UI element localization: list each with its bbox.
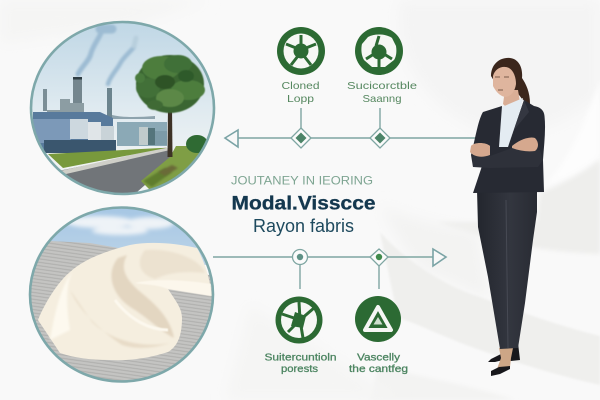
title block [231,174,376,236]
node: diamond 2 [370,128,390,148]
trousers [477,190,537,349]
road [61,150,170,193]
smoke plumes [78,29,136,84]
node: diamond 1 [291,128,311,148]
label: Cloned Lopp: Cloned [282,80,320,92]
label: Sucicorctble Saanng: Saanng [362,93,402,105]
icon: triangular recycle bottom right [355,296,401,342]
kicker: JOUTANEY IN IEORING [231,174,373,188]
back shoe [488,343,520,362]
label: Sucicorctble Saanng: Sucicorctble [347,80,417,92]
gray knit cloth [31,241,212,380]
arrow: right [433,249,446,266]
icon: recycle bottom left [276,296,322,344]
figure: businesswoman [470,58,545,376]
icon: recycle top left [277,27,325,75]
hair and ponytail [491,58,530,104]
ankle [497,348,513,369]
lapel [508,100,529,147]
label: Sucicorctble Saanng [347,80,417,105]
photo: factory with tree [28,18,218,200]
tree [135,55,205,157]
subtitle: Rayon fabris [253,216,354,236]
label: Vascelly the cantfeg: the cantfeg [349,363,408,375]
distant buildings [117,122,167,146]
label: Vascelly the cantfeg [349,352,408,375]
neck [503,90,520,112]
main title: Modal.Visscce [232,194,376,214]
pipework [47,99,84,112]
label: Suitercuntioln porests: porests [281,363,318,375]
label: Suitercuntioln porests: Suitercuntioln [264,352,337,364]
front shoe [491,366,510,376]
label: Cloned Lopp [282,80,320,105]
crossed arms [472,148,543,168]
label: Suitercuntioln porests [264,352,337,375]
face [493,67,516,97]
chimneys [73,80,82,103]
bottom timeline with right arrow [213,249,446,289]
facial features [495,77,509,90]
node: circle [292,250,308,264]
power plant [33,112,113,153]
icon: recycle top right [355,27,403,75]
label: Cloned Lopp: Lopp [287,93,314,105]
label: Vascelly the cantfeg: Vascelly [357,352,401,364]
photo: cream fabric [28,206,214,383]
blazer [471,100,545,193]
top timeline with left arrow [225,108,476,148]
grass left [48,148,166,168]
grass right [141,146,199,189]
cream fabric drape [38,243,212,360]
arrow: left [225,130,238,147]
hands [470,143,490,157]
clouds [66,216,174,235]
bush [186,135,208,153]
shirt [498,98,523,148]
node: diamond [370,249,388,266]
